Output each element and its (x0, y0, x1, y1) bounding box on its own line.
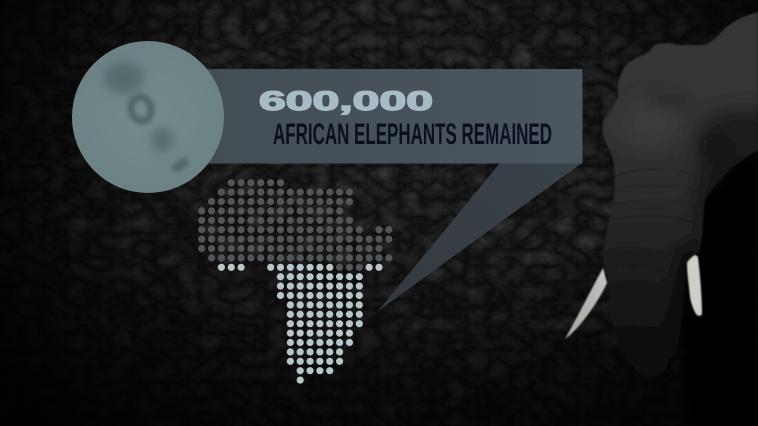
right tusk (687, 255, 702, 316)
elephant (564, 12, 758, 369)
elephant body in shadow (680, 140, 758, 426)
head shading (695, 110, 758, 230)
figure: 600,000: 600,000 (259, 86, 433, 116)
trunk wrinkles (613, 216, 680, 328)
callout pointer (378, 163, 582, 311)
trunk right shadow (664, 235, 700, 380)
brow shadow (658, 98, 675, 104)
elephant head and trunk (602, 12, 758, 369)
callout banner (205, 69, 582, 164)
circle with blurred figure (72, 41, 224, 193)
brow highlight (638, 129, 664, 134)
dots: remaining elephant range (221, 267, 381, 380)
left tusk (565, 268, 607, 339)
dots: northern Africa, lost elephant range (202, 183, 391, 267)
caption: African elephants remained: AFRICAN ELEPHANTS REMAINED (273, 118, 552, 151)
dot map of Africa (202, 183, 391, 380)
eye socket (700, 137, 708, 152)
